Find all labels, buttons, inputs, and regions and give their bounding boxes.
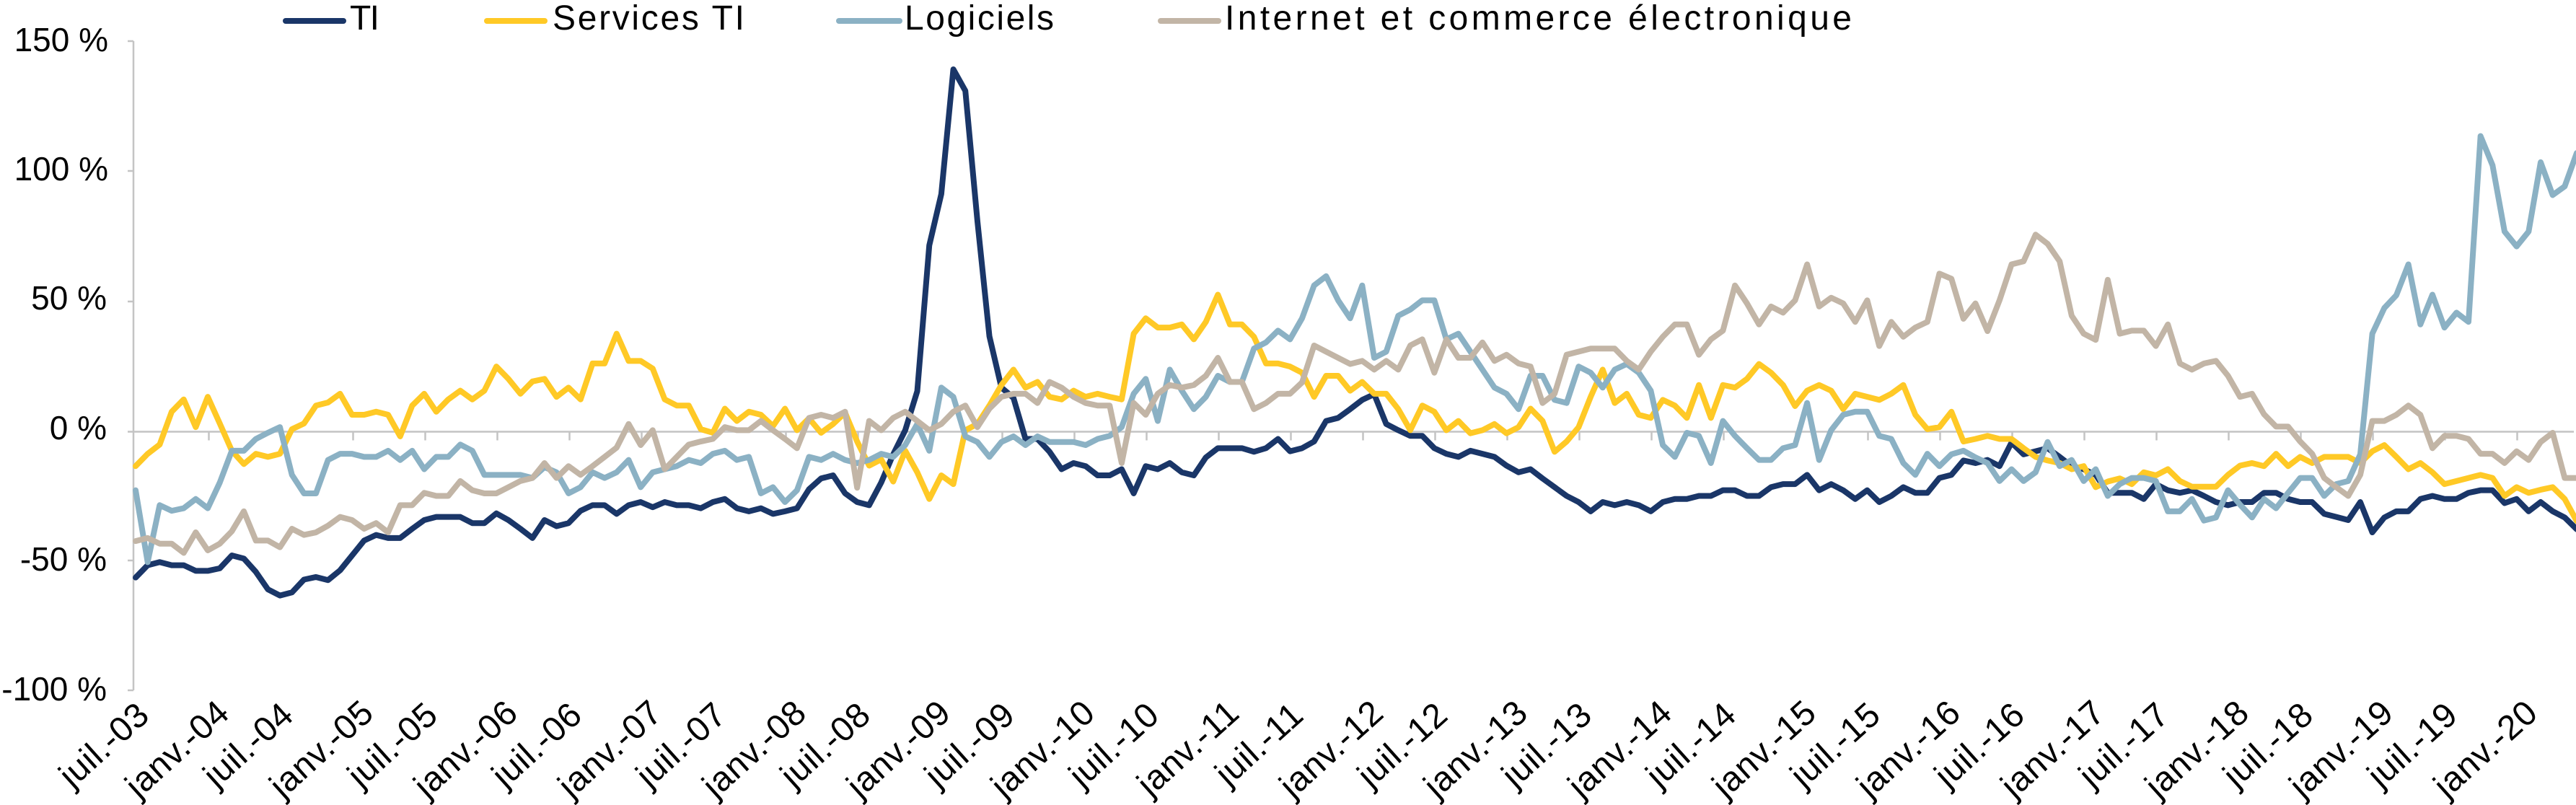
x axis labels: janv.-20	[2425, 693, 2545, 805]
x axis labels: juil.-10	[1061, 695, 1166, 796]
series: Services TI	[136, 295, 2576, 521]
x axis labels: juil.-18	[2215, 695, 2321, 796]
x axis labels: janv.-14	[1560, 693, 1679, 805]
x axis labels: juil.-05	[340, 695, 445, 796]
x axis labels: juil.-19	[2360, 695, 2465, 796]
legend item: TI: TI	[350, 0, 379, 38]
x axis labels	[51, 693, 2545, 805]
x axis labels: janv.-09	[838, 693, 958, 805]
series: Internet et commerce électronique	[136, 234, 2576, 553]
y axis labels: 50 %	[31, 279, 107, 317]
legend item: Logiciels: Logiciels	[905, 0, 1054, 38]
x axis labels: janv.-06	[405, 693, 525, 805]
legend item: Services TI: Services TI	[553, 0, 744, 38]
x axis labels: janv.-05	[261, 693, 381, 805]
y axis labels: -100 %	[1, 670, 107, 708]
legend item: Internet et commerce électronique: Internet et commerce électronique	[1225, 0, 1852, 38]
x axis labels: janv.-07	[550, 693, 669, 805]
x axis labels: janv.-12	[1271, 693, 1391, 805]
x axis labels: juil.-09	[917, 695, 1022, 796]
x axis labels: janv.-04	[117, 693, 237, 805]
y axis labels: 150 %	[14, 21, 108, 58]
x axis labels: juil.-12	[1350, 695, 1455, 796]
x axis labels: janv.-16	[1848, 693, 1968, 805]
x axis labels: juil.-07	[628, 695, 734, 796]
y axis labels: 0 %	[50, 409, 107, 447]
x axis labels: janv.-13	[1415, 693, 1535, 805]
x axis labels: juil.-03	[51, 695, 157, 796]
legend item: TI	[286, 0, 379, 38]
legend	[286, 0, 1852, 38]
x axis labels: juil.-14	[1638, 695, 1744, 796]
x axis labels: janv.-11	[1129, 693, 1247, 804]
x axis labels: juil.-06	[484, 695, 589, 796]
axes and tick marks	[128, 41, 2574, 690]
x axis labels: janv.-18	[2137, 693, 2256, 805]
x axis labels: janv.-19	[2281, 693, 2401, 805]
x axis labels: janv.-10	[983, 693, 1102, 805]
x axis labels: juil.-17	[2071, 695, 2176, 796]
y axis labels: -50 %	[20, 540, 107, 578]
x axis labels: juil.-11	[1207, 695, 1311, 794]
series: Logiciels	[136, 136, 2576, 562]
x axis labels: janv.-17	[1992, 693, 2112, 805]
x axis labels: juil.-13	[1494, 695, 1599, 796]
y axis labels	[1, 21, 108, 708]
x axis labels: juil.-08	[773, 695, 878, 796]
x axis labels: juil.-16	[1927, 695, 2032, 796]
x axis labels: janv.-08	[694, 693, 814, 805]
x axis labels: juil.-15	[1782, 695, 1888, 796]
x axis labels: juil.-04	[195, 695, 301, 796]
x axis labels: janv.-15	[1704, 693, 1824, 805]
y axis labels: 100 %	[14, 150, 108, 188]
series: TI	[136, 69, 2576, 596]
